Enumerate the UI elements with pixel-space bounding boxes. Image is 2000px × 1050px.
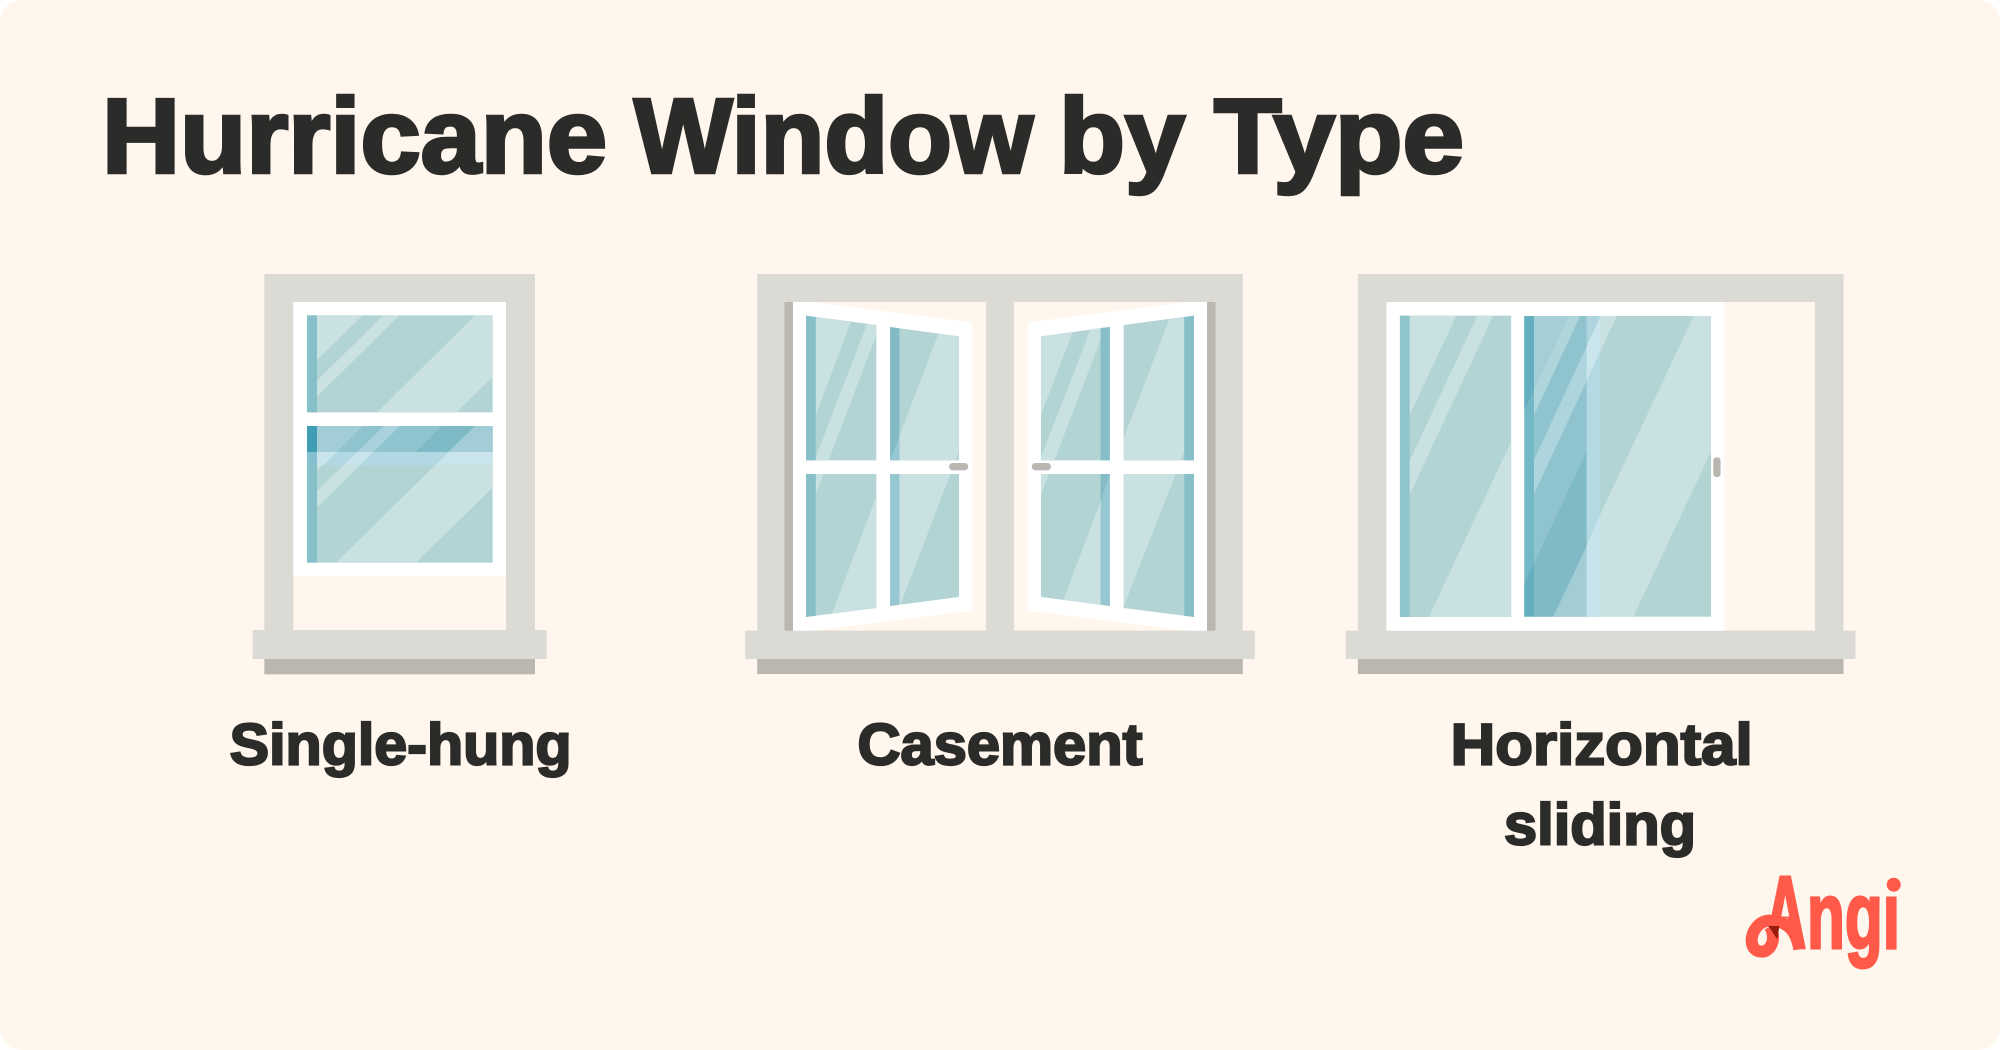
- logo: Angi: A: [1765, 857, 1806, 969]
- window: single-hung: [253, 274, 547, 674]
- title: by: [1059, 78, 1185, 196]
- title: Type: [1214, 78, 1464, 196]
- label: horizontal sliding: sliding: [1504, 792, 1696, 858]
- label: horizontal sliding: [1451, 712, 1753, 858]
- logo: Angi: ngi: [1807, 863, 1900, 969]
- label: casement: Casement: [858, 712, 1142, 778]
- title: [102, 78, 1464, 196]
- title: Hurricane: [102, 78, 607, 196]
- label: single-hung: Single-hung: [230, 712, 572, 778]
- label: horizontal sliding: Horizontal: [1451, 712, 1753, 778]
- window: horizontal sliding: [1346, 274, 1856, 674]
- window: casement: [745, 274, 1255, 674]
- title: Window: [634, 78, 1034, 196]
- logo: Angi: [1746, 876, 1901, 970]
